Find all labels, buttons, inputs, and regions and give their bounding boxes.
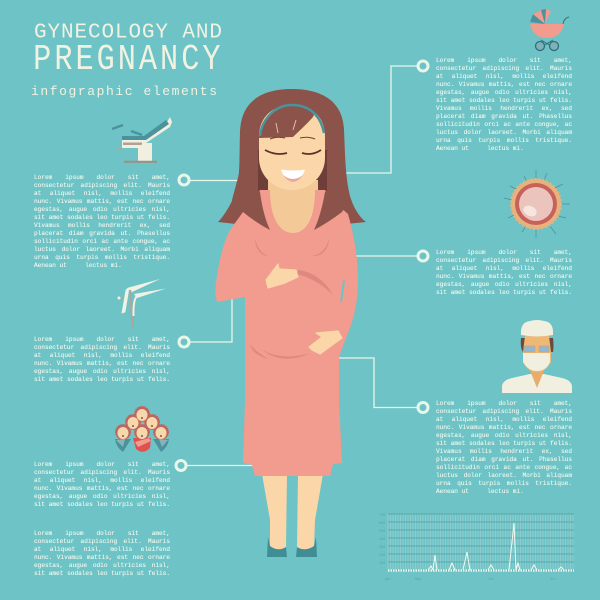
text block: left 4: nunc. Vivamus mattis, est nec ornare [34, 554, 170, 561]
mouth [281, 170, 305, 180]
woman figure [215, 89, 366, 557]
text block: right 1: egestas, augue odio ultricies nisl, [436, 89, 572, 96]
text block: right 1: luctus dolor laoreet. Morbi aliquam [436, 129, 572, 136]
text block: right 3: egestas, augue odio ultricies nisl, [436, 432, 572, 439]
text block: left 3: egestas, augue odio ultricies nisl, [34, 493, 170, 500]
text block: right 1: Lorem ipsum dolor sit amet, [436, 57, 572, 64]
icon: doctor [502, 320, 572, 393]
text block: right 1: sit amet sodales leo turpis ut felis. [436, 97, 572, 104]
bangs [259, 105, 314, 138]
text block: right 3: nunc. Vivamus mattis, est nec ornare [436, 424, 572, 431]
eyes [265, 150, 321, 154]
line chart: 600 [379, 522, 385, 526]
text block: right 1: Vivamus mollis hendrerit ex, sed [436, 105, 572, 112]
text block: right 3 [436, 400, 572, 495]
upper hand [266, 264, 298, 288]
text block: left 4: consectetur adipiscing elit. Mauris [34, 538, 170, 545]
line chart: May [415, 578, 421, 582]
text block: right 2: egestas, augue odio ultricies nisl, [436, 281, 572, 288]
text block: left 4: egestas, augue odio ultricies nisl, [34, 562, 170, 569]
text block: left 4: Lorem ipsum dolor sit amet, [34, 530, 170, 537]
text block: left 1: nunc. Vivamus mattis, est nec ornare [34, 198, 170, 205]
line chart: 700 [379, 514, 385, 518]
face [259, 105, 325, 190]
line chart: 200 [379, 554, 385, 558]
text block: left 2: egestas, augue odio ultricies nisl, [34, 368, 170, 375]
lower hand [309, 331, 342, 354]
text block: right 1: at aliquet nisl, mollis eleifend [436, 73, 572, 80]
line chart: Apr [385, 577, 391, 582]
text block: right 1: sollicitudin orci ac ante congue, ac [436, 121, 572, 128]
text block: right 3: consectetur adipiscing elit. Mauris [436, 408, 572, 415]
text block: right 1: urna quis turpis mollis tristique. [436, 137, 572, 144]
text block: left 1 [34, 174, 170, 269]
connector: left bottom [176, 460, 254, 470]
text block: left 3: consectetur adipiscing elit. Mauris [34, 469, 170, 476]
text block: right 2: Lorem ipsum dolor sit amet, [436, 249, 572, 256]
text block: left 1: at aliquet nisl, mollis eleifend [34, 190, 170, 197]
title: GYNECOLOGY AND [34, 22, 222, 44]
text block: left 3: sit amet sodales leo turpis ut felis. [34, 501, 170, 508]
text block: right 1: placerat diam gravida ut. Phasellus [436, 113, 572, 120]
legs [262, 474, 323, 550]
text block: left 4 [34, 530, 170, 577]
title [31, 22, 222, 99]
line chart: 100 [379, 562, 385, 566]
text block: left 1: Lorem ipsum dolor sit amet, [34, 174, 170, 181]
front hair [232, 150, 350, 230]
text block: right 1 [436, 57, 572, 152]
title: PREGNANCY [33, 39, 221, 80]
text block: left 4: at aliquet nisl, mollis eleifend [34, 546, 170, 553]
text block: left 3: nunc. Vivamus mattis, est nec ornare [34, 485, 170, 492]
text block: right 3: luctus dolor laoreet. Morbi aliquam [436, 472, 572, 479]
text block: left 2: nunc. Vivamus mattis, est nec ornare [34, 360, 170, 367]
icon: gynecological chair [112, 117, 172, 162]
text block: right 2: consectetur adipiscing elit. Mauris [436, 257, 572, 264]
text block: right 2: sit amet sodales leo turpis ut felis. [436, 289, 572, 296]
text block: left 1: egestas, augue odio ultricies nisl, [34, 206, 170, 213]
text block: right 3: at aliquet nisl, mollis eleifend [436, 416, 572, 423]
text block: left 1: sit amet sodales leo turpis ut felis. [34, 214, 170, 221]
line chart: Jul [550, 577, 556, 582]
text block: right 3: Vivamus mollis hendrerit ex, sed [436, 448, 572, 455]
text block: left 2: consectetur adipiscing elit. Mauris [34, 344, 170, 351]
title: infographic elements [31, 84, 217, 99]
hair shadow [258, 150, 328, 194]
text block: right 3: Lorem ipsum dolor sit amet, [436, 400, 572, 407]
icon: egg cell [504, 170, 570, 238]
text block: left 3: Lorem ipsum dolor sit amet, [34, 461, 170, 468]
text block: right 1: Aenean ut lectus mi. [436, 145, 524, 152]
line chart: 300 [379, 546, 385, 550]
text block: left 3 [34, 461, 170, 508]
shoes [267, 537, 317, 557]
text block: right 1: consectetur adipiscing elit. Mauris [436, 65, 572, 72]
connector: right bottom [338, 358, 428, 412]
text block: right 3: sit amet sodales leo turpis ut felis. [436, 440, 572, 447]
text block: left 1: urna quis turpis mollis tristique. [34, 254, 170, 261]
line chart: Jun [488, 578, 494, 582]
connector: right middle [356, 251, 428, 261]
text block: left 2 [34, 336, 170, 383]
text block: left 1: Aenean ut lectus mi. [34, 262, 122, 269]
text block: left 1: sollicitudin orci ac ante congue, ac [34, 238, 170, 245]
arm gap [340, 280, 345, 302]
text block: right 3: placerat diam gravida ut. Phasellus [436, 456, 572, 463]
text block: left 4: sit amet sodales leo turpis ut felis. [34, 570, 170, 577]
line chart [379, 514, 574, 582]
text block: left 2: Lorem ipsum dolor sit amet, [34, 336, 170, 343]
text block: right 3: sollicitudin orci ac ante congue, ac [436, 464, 572, 471]
text block: left 2: sit amet sodales leo turpis ut felis. [34, 376, 170, 383]
text block: right 2 [436, 249, 572, 296]
connector: left top [179, 175, 242, 185]
headband [260, 105, 324, 136]
text block: left 3: at aliquet nisl, mollis eleifend [34, 477, 170, 484]
text block: right 2: at aliquet nisl, mollis eleifend [436, 265, 572, 272]
connector: left middle [179, 298, 232, 347]
dress [215, 190, 358, 476]
text block: left 1: luctus dolor laoreet. Morbi aliquam [34, 246, 170, 253]
text block: right 3: Aenean ut lectus mi. [436, 488, 524, 495]
text block: right 2: nunc. Vivamus mattis, est nec ornare [436, 273, 572, 280]
dress folds [250, 238, 333, 359]
fringe highlights [276, 120, 296, 133]
icon: speculum [118, 279, 166, 327]
neck [268, 180, 318, 236]
hair back [218, 89, 366, 224]
text block: right 1: nunc. Vivamus mattis, est nec ornare [436, 81, 572, 88]
text block: left 2: at aliquet nisl, mollis eleifend [34, 352, 170, 359]
icon: stroller [530, 9, 569, 50]
text block: left 1: consectetur adipiscing elit. Mauris [34, 182, 170, 189]
line chart: 500 [379, 530, 385, 534]
text block: right 3: urna quis turpis mollis tristique. [436, 480, 572, 487]
icon: babies [115, 406, 169, 452]
line chart: 400 [379, 538, 385, 542]
text block: left 1: Vivamus mollis hendrerit ex, sed [34, 222, 170, 229]
eyebrows [270, 137, 315, 139]
connector: right top [342, 61, 428, 173]
text block: left 1: placerat diam gravida ut. Phasellus [34, 230, 170, 237]
